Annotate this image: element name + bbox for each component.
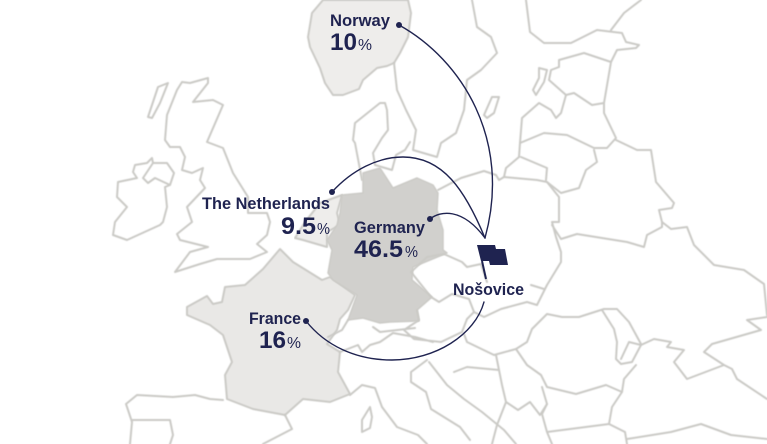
route: The Netherlands to Nošovice xyxy=(332,157,485,238)
label: Nošovice: Nošovice xyxy=(453,281,524,299)
icon: Netherlands route dot xyxy=(329,189,335,195)
country: Germany xyxy=(327,168,447,323)
label: The Netherlands 9.5%: The Netherlands xyxy=(202,195,330,213)
route: Germany to Nošovice xyxy=(430,213,485,238)
label: France 16%: 16 xyxy=(259,327,286,354)
label: Norway 10%: % xyxy=(358,37,372,54)
label: The Netherlands 9.5%: % xyxy=(317,221,330,238)
route: Norway to Nošovice xyxy=(399,25,492,238)
label: France 16%: France xyxy=(249,310,301,328)
label: The Netherlands 9.5% xyxy=(202,195,330,240)
label: Norway 10%: Norway xyxy=(330,12,391,30)
country: Norway xyxy=(308,0,411,95)
label: The Netherlands 9.5%: 9.5 xyxy=(281,213,316,240)
icon: flag at Nošovice xyxy=(477,245,508,279)
label: France 16%: % xyxy=(287,335,301,352)
label: Germany 46.5%: 46.5 xyxy=(354,236,403,263)
icon: France route dot xyxy=(303,318,309,324)
label: Norway 10% xyxy=(330,12,391,56)
label: Germany 46.5%: % xyxy=(405,244,418,261)
route: France to Nošovice xyxy=(306,302,484,360)
icon: Norway route dot xyxy=(396,22,402,28)
country: The Netherlands xyxy=(295,195,342,247)
label: Germany 46.5% xyxy=(354,219,426,263)
icon: Germany route dot xyxy=(427,216,433,222)
label: Norway 10%: 10 xyxy=(330,29,357,56)
country: France xyxy=(187,249,355,415)
label: Germany 46.5%: Germany xyxy=(354,219,426,237)
label: France 16% xyxy=(249,310,301,354)
